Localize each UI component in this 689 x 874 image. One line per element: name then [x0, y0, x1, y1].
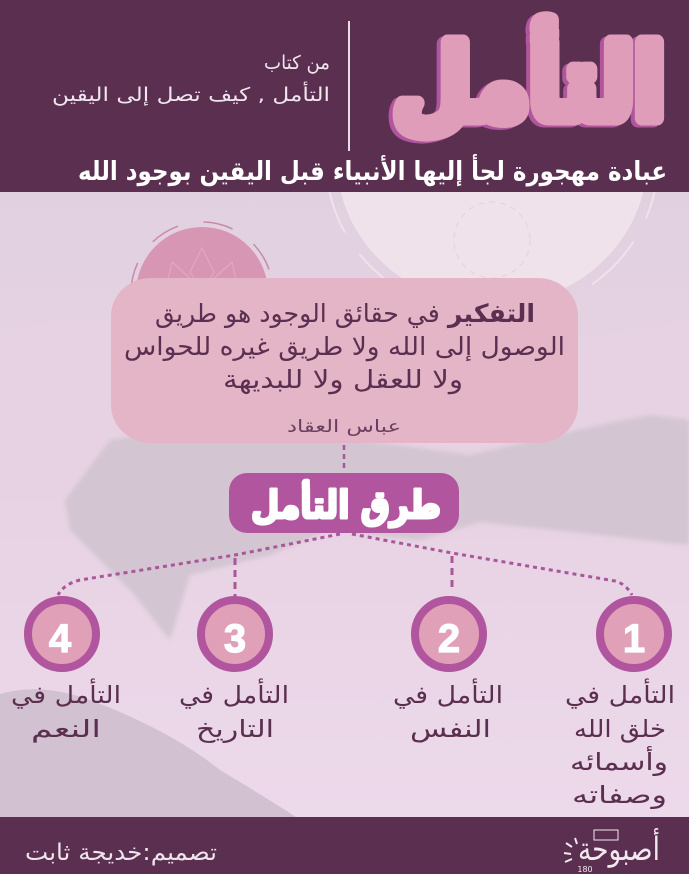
designer credit: تصميم:خديجة ثابت	[25, 840, 217, 866]
item 1: 1	[623, 617, 645, 661]
title: shadow layer: التأمل	[389, 20, 661, 144]
quote line 3: ولا للعقل ولا للبديهة	[223, 365, 463, 395]
item 1	[565, 600, 675, 809]
item 2: 2	[438, 617, 460, 661]
connectors: heading to items	[58, 534, 632, 597]
item 1: خلق الله	[574, 715, 666, 743]
book label: من كتاب	[264, 52, 330, 74]
item 1: وصفاته	[572, 781, 667, 809]
item 4: 4	[49, 617, 72, 661]
connector: quote to heading	[343, 445, 345, 472]
item 4: التأمل في	[11, 678, 121, 709]
background moon	[326, 4, 658, 316]
header band	[0, 0, 689, 192]
logo: أصبوحة	[578, 828, 660, 868]
heading pill: طرق التأمل	[251, 480, 441, 527]
book title: التأمل , كيف تصل إلى اليقين	[52, 81, 330, 107]
quote line 2: الوصول إلى الله ولا طريق غيره للحواس	[124, 332, 565, 362]
footer band	[0, 817, 689, 874]
item 3: 3	[224, 617, 246, 661]
heading pill	[229, 473, 459, 533]
item 2	[393, 600, 503, 743]
quote line 1: التفكير في حقائق الوجود هو طريق	[155, 299, 535, 329]
item 3	[179, 600, 289, 743]
item 1: التأمل في	[565, 678, 675, 709]
background mountains	[65, 415, 689, 640]
quote author: عباس العقاد	[287, 417, 401, 437]
background sun	[131, 222, 273, 364]
divider	[348, 21, 350, 151]
foreground hill	[0, 689, 296, 817]
item 3: التأمل في	[179, 678, 289, 709]
item 3: التاريخ	[196, 715, 274, 743]
quote panel	[111, 278, 578, 443]
logo: 180	[577, 865, 593, 874]
item 2: التأمل في	[393, 678, 503, 709]
item 4	[11, 600, 121, 743]
title: التأمل	[393, 18, 665, 142]
item 2: النفس	[410, 715, 491, 743]
item 4: النعم	[31, 715, 101, 743]
item 1: وأسمائه	[570, 746, 668, 776]
logo	[564, 828, 660, 874]
